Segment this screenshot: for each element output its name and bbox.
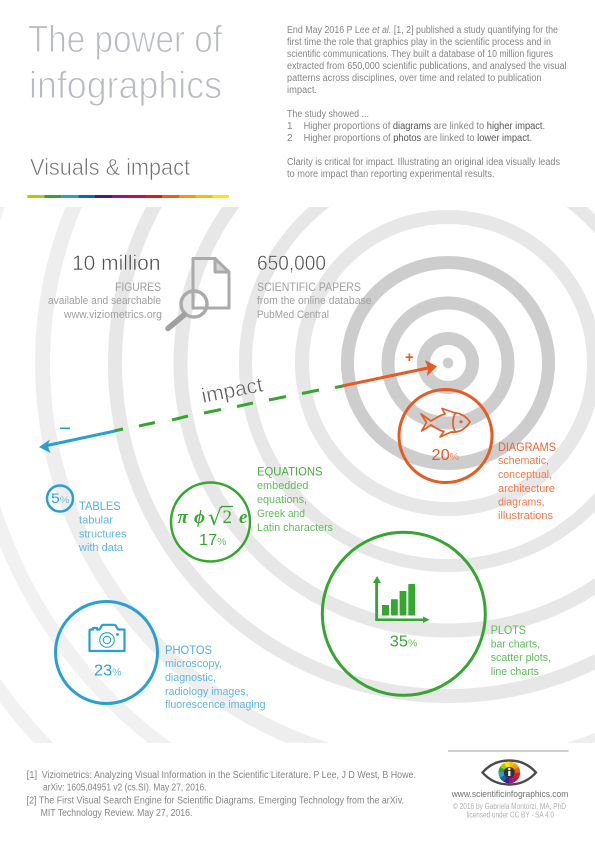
diagrams text <box>498 440 556 522</box>
tables text: TABLES <box>79 499 121 513</box>
intro text block: 1 <box>287 121 293 132</box>
copyright: © 2016 by Gabriela Montorzi, MA, PhD <box>453 802 566 811</box>
title <box>28 19 222 107</box>
diagrams text: DIAGRAMS <box>498 440 556 454</box>
stat: 10 million figures: FIGURES <box>115 280 161 294</box>
plots text: line charts <box>491 666 539 678</box>
plots text: PLOTS <box>491 623 526 637</box>
photos text: microscopy, <box>165 658 222 670</box>
equations percentage: 17% <box>199 532 227 549</box>
intro text block: extracted from 650,000 scientific publications, and analysed the visual <box>287 61 566 72</box>
photos text: fluorescence imaging <box>165 699 266 711</box>
impact label: impact <box>200 373 265 408</box>
icon: document and magnifier <box>168 258 229 328</box>
panel: diagrams <box>399 390 556 522</box>
equation symbols <box>178 506 248 531</box>
licence: licensed under CC BY - SA 4.0 <box>467 811 554 820</box>
equation symbols: π <box>178 507 188 528</box>
references: MIT Technology Review. May 27, 2016. <box>41 808 192 819</box>
equations text: embedded <box>257 480 308 492</box>
photos percentage: 23% <box>94 663 122 680</box>
tables text: structures <box>79 529 127 541</box>
arrow: positive orange <box>342 360 437 386</box>
panel: equations <box>171 465 333 562</box>
intro text block: 2 <box>287 133 293 144</box>
icon: fish <box>421 408 470 437</box>
equation symbols: √ <box>208 506 223 531</box>
references: Viziometrics: Analyzing Visual Information in the Scientific Literature. P Lee, J D West, B Howe. <box>42 770 416 781</box>
photos text <box>165 643 266 711</box>
diagrams text: illustrations <box>498 510 553 522</box>
tables text <box>78 499 127 554</box>
plots percentage: 35% <box>390 634 418 651</box>
references: [2] The First Visual Search Engine for Scientific Diagrams. Emerging Technology from the arXiv. <box>27 796 404 807</box>
photos text: PHOTOS <box>165 643 212 657</box>
subtitle: Visuals & impact <box>30 154 191 180</box>
intro text block: Higher proportions of photos are linked to lower impact. <box>304 133 532 144</box>
diagrams text: architecture <box>498 483 555 495</box>
stat: 650,000 papers: SCIENTIFIC PAPERS <box>257 280 361 294</box>
title: The power of <box>28 19 222 61</box>
icon: camera <box>90 625 124 651</box>
intro text block <box>287 25 566 180</box>
equations text: equations, <box>257 494 307 506</box>
panel: photos <box>56 602 266 711</box>
stat: 650,000 papers <box>257 252 372 321</box>
intro text block: patterns across disciplines, over time and related to publication <box>287 73 542 84</box>
references: [1] <box>27 770 37 781</box>
references: arXiv: 1605.04951 v2 (cs.SI). May 27, 2016. <box>43 783 206 794</box>
stat: 650,000 papers: 650,000 <box>257 252 326 275</box>
stat: 10 million figures: 10 million <box>72 252 160 275</box>
intro text block: first time the role that graphics play in the scientific process and in <box>287 37 551 48</box>
intro text block: to more impact than reporting experimental results. <box>287 169 494 180</box>
references <box>27 770 416 819</box>
panel: tables <box>47 486 127 554</box>
icon: rainbow eye <box>482 760 536 784</box>
equation symbols: e <box>239 507 248 528</box>
stat: 650,000 papers: from the online database <box>257 295 372 307</box>
intro text block: Clarity is critical for impact. Illustrating an original idea visually leads <box>287 157 560 168</box>
equation symbols: 2 <box>222 507 232 528</box>
icon: bar chart <box>373 576 430 623</box>
panel: plots <box>322 532 551 695</box>
stat: 10 million figures: www.viziometrics.org <box>63 309 162 321</box>
title: infographics <box>29 65 222 107</box>
impact arrow <box>39 349 437 453</box>
intro text block: The study showed ... <box>287 109 369 120</box>
website: www.scientificinfographics.com <box>451 789 568 800</box>
tables text: tabular <box>79 515 113 527</box>
diagrams text: schematic, <box>498 455 549 467</box>
intro text block: End May 2016 P Lee et al. [1, 2] published a study quantifying for the <box>287 25 558 36</box>
colour bar <box>27 195 229 198</box>
photos text: diagnostic, <box>165 672 216 684</box>
plus sign: + <box>405 349 414 366</box>
equations text: Latin characters <box>257 522 333 534</box>
stat: 10 million figures: available and searchable <box>48 295 161 307</box>
tables percentage: 5% <box>51 491 70 506</box>
diagrams percentage: 20% <box>432 447 459 464</box>
stat: 10 million figures <box>48 252 162 321</box>
equation symbols: ϕ <box>194 507 205 528</box>
equations text: EQUATIONS <box>257 465 322 479</box>
diagrams text: diagrams, <box>498 497 545 509</box>
stat: 650,000 papers: PubMed Central <box>257 309 329 321</box>
intro text block: Higher proportions of diagrams are linked to higher impact. <box>304 121 545 132</box>
plots text: bar charts, <box>491 639 540 651</box>
equations text <box>257 465 333 534</box>
equations text: Greek and <box>257 508 305 520</box>
arrow: negative blue <box>39 431 115 453</box>
intro text block: impact. <box>287 85 317 96</box>
photos text: radiology images, <box>165 686 249 698</box>
target rings background <box>0 207 595 743</box>
intro text block: scientific communications. They built a database of 10 million figures <box>287 49 553 60</box>
footer logo and credits <box>448 751 568 820</box>
tables text: with data <box>78 542 124 554</box>
plots text <box>491 623 551 678</box>
diagrams text: conceptual, <box>498 469 552 481</box>
minus sign <box>60 428 70 429</box>
plots text: scatter plots, <box>491 652 551 664</box>
arrow: dashed green <box>114 386 343 431</box>
